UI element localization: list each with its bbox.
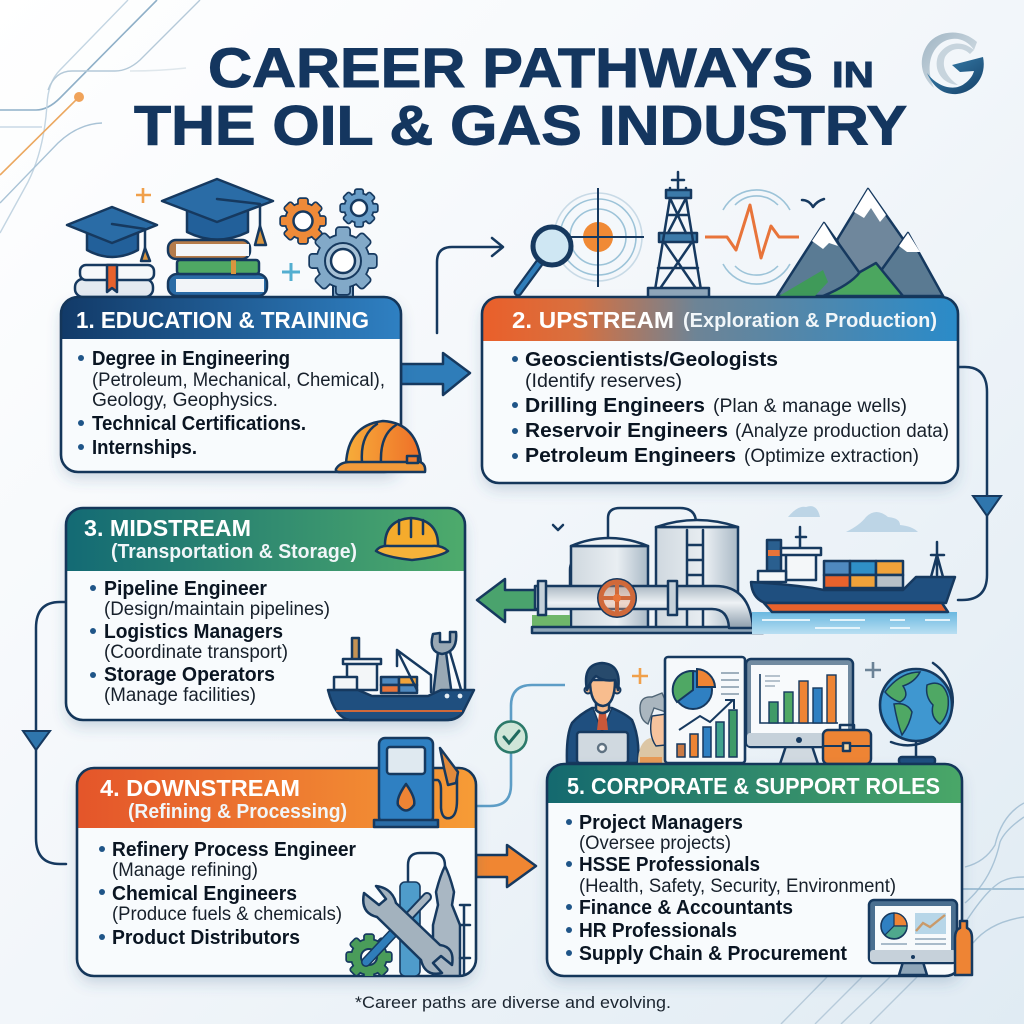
title: IN [832,54,874,95]
bullet list: education: (Petroleum, Mechanical, Chemical), [92,370,385,391]
arrow: blue [401,353,470,395]
connector: downstream to corporate, with check badge [476,685,565,806]
heading: upstream: 2. UPSTREAM [512,307,674,333]
bullet list: education: Technical Certifications. [92,413,306,435]
bullet list: upstream: (Plan & manage wells) [713,396,907,417]
bullet list: downstream: (Produce fuels & chemicals) [112,904,342,925]
icon: clouds [788,506,918,532]
heading: downstream [100,775,347,823]
connector: upstream to midstream [958,367,1001,600]
icon: plus signs near corporate [632,662,881,684]
heading: midstream [84,515,357,563]
icon: sea [752,612,957,634]
bullet list: upstream: (Optimize extraction) [744,446,919,467]
bullet list: upstream: (Analyze production data) [735,421,949,442]
bullet list: corporate: Project Managers [579,812,743,834]
bullet list: education [78,348,385,459]
arrow: green [477,579,536,622]
icon: container ship [751,527,955,612]
bullet list: upstream [512,349,949,467]
bullet list: education: Geology, Geophysics. [92,390,278,411]
icon: briefcase [823,725,871,764]
bullet list: corporate: Finance & Accountants [579,897,793,919]
arrow: orange [476,845,536,887]
icon: mountains and bird [777,189,943,296]
heading: midstream: 3. MIDSTREAM [84,515,251,541]
icon: refinery tower and tools [347,853,470,979]
icon: person [567,663,638,763]
icon: report card with charts [665,657,745,763]
panel: 1 education and training [61,297,401,472]
bullet list: downstream [99,839,356,949]
panel: 3 midstream [66,508,465,720]
title: CAREER PATHWAYS [208,36,813,99]
bullet list: upstream: Reservoir Engineers [525,420,728,442]
bullet list: downstream: (Manage refining) [112,860,258,881]
bullet list: corporate: (Health, Safety, Security, Environment) [579,876,896,897]
icon: plus signs near education [136,188,300,281]
bullet list: midstream: Pipeline Engineer [104,578,267,600]
heading: upstream: (Exploration & Production) [683,309,937,332]
icon: oil derrick [648,172,709,298]
bullet list: midstream: (Coordinate transport) [104,642,288,663]
bullet list: education: Degree in Engineering [92,348,290,370]
heading: downstream: (Refining & Processing) [128,800,347,823]
bullet list: midstream: (Design/maintain pipelines) [104,599,330,620]
icon: fuel pump [374,738,458,827]
icon: second person behind chart [638,693,666,763]
bullet list: upstream: (Identify reserves) [525,371,682,392]
icon: ship with wrench [328,632,474,720]
heading: corporate: 5. CORPORATE & SUPPORT ROLES [567,773,940,799]
icon: yellow hard hat [376,518,448,560]
bullet list: corporate [566,812,896,965]
bullet list: downstream: Product Distributors [112,927,300,949]
logo [922,32,984,94]
title [134,36,907,156]
bullet list: corporate: HR Professionals [579,920,737,942]
bullet list: corporate: Supply Chain & Procurement [579,943,847,965]
footnote: *Career paths are diverse and evolving. [355,993,671,1012]
bullet list: education: Internships. [92,437,197,459]
icon: monitor with bar chart [746,659,853,764]
heading: upstream [512,307,937,333]
bullet list: midstream: (Manage facilities) [104,685,256,706]
heading: downstream: 4. DOWNSTREAM [100,775,300,801]
bullet list: upstream: Drilling Engineers [525,395,705,417]
icon: globe [880,663,953,764]
icon: gears [281,190,377,297]
icon: small monitor and bottle [869,900,972,975]
bullet list: midstream: Logistics Managers [104,621,283,643]
bullet list: midstream [90,578,330,706]
bullet list: upstream: Geoscientists/Geologists [525,349,778,371]
bullet list: corporate: HSSE Professionals [579,854,760,876]
panel: 5 corporate and support roles [547,764,962,976]
icon: small graduation cap on books [67,207,157,297]
panel: 4 downstream [77,768,476,976]
bullet list: upstream: Petroleum Engineers [525,445,736,467]
icon: magnifying glass and target [518,188,644,292]
bullet list: downstream: Chemical Engineers [112,883,297,905]
connector: midstream to downstream [23,602,66,864]
icon: seismic pulse [705,190,799,284]
icon: orange hard hat [336,421,425,472]
connector: education to upstream [437,238,503,333]
heading: education: 1. EDUCATION & TRAINING [76,307,369,333]
bullet list: midstream: Storage Operators [104,664,275,686]
icon: large graduation cap on books [162,179,273,296]
panel: 2 upstream [482,297,958,483]
bullet list: downstream: Refinery Process Engineer [112,839,356,861]
bullet list: corporate: (Oversee projects) [579,833,731,854]
title: THE OIL & GAS INDUSTRY [134,94,907,156]
icon: storage tanks and pipeline [532,508,763,633]
heading: midstream: (Transportation & Storage) [111,540,357,563]
